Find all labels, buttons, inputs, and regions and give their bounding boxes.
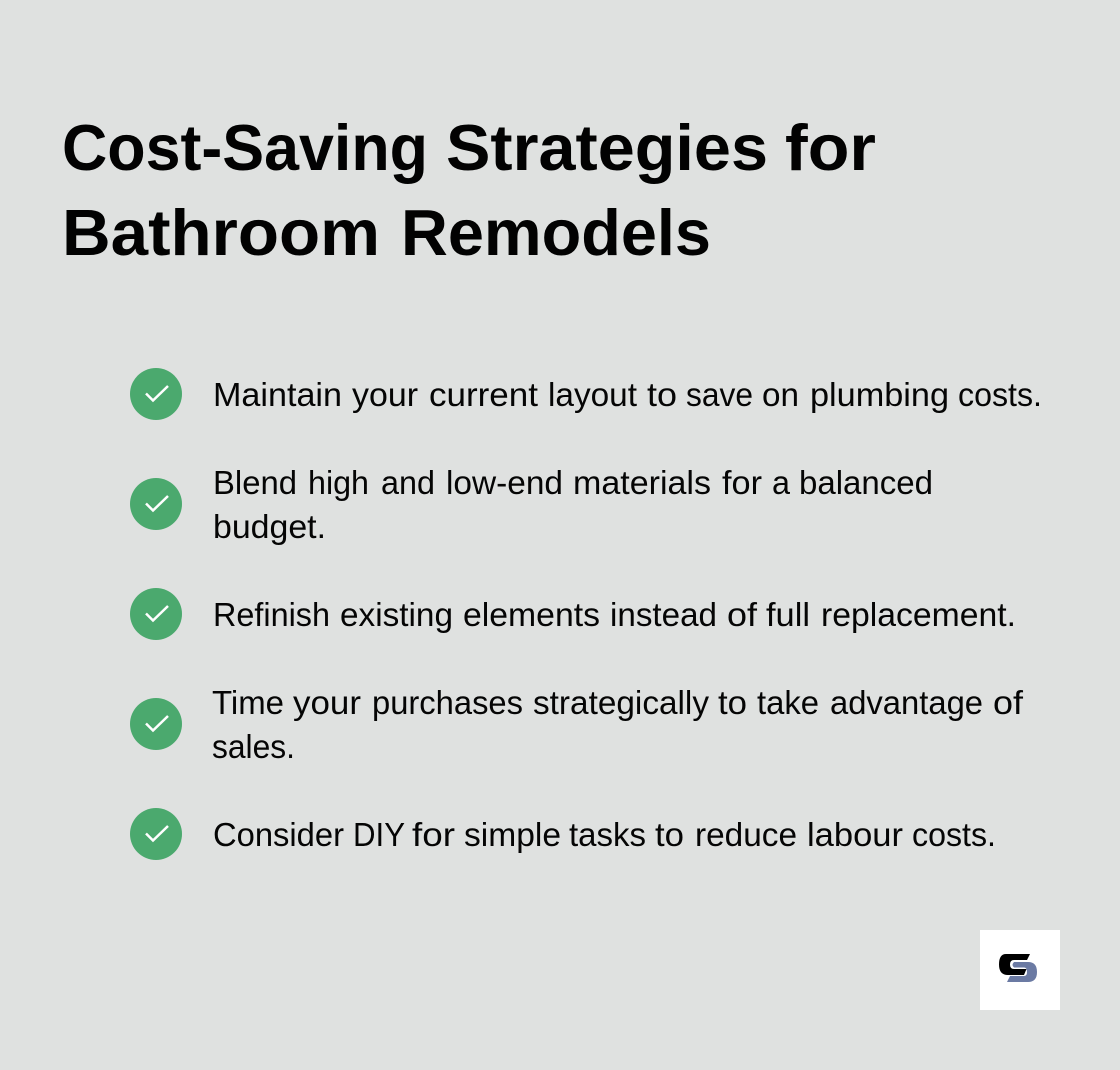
text: item 2 bbox=[213, 464, 933, 545]
text: item 3: instead bbox=[610, 596, 717, 633]
text: item 2: Blend bbox=[213, 464, 297, 501]
text: item 4: your bbox=[293, 684, 361, 721]
text: item 1 bbox=[213, 376, 1042, 413]
text: item 2: for bbox=[722, 464, 762, 501]
icon: check 1 bbox=[130, 368, 182, 420]
title bbox=[62, 112, 876, 269]
text: item 2: materials bbox=[573, 464, 711, 501]
text: item 1: plumbing bbox=[810, 376, 949, 413]
text: item 5: reduce bbox=[695, 816, 797, 853]
item 1: layout bbox=[130, 368, 1042, 420]
text: item 5: DIY bbox=[353, 816, 405, 853]
text: item 4: take bbox=[757, 684, 819, 721]
text: item 1: layout bbox=[548, 376, 637, 413]
icon: check 4 bbox=[130, 698, 182, 750]
text: item 4: Time bbox=[212, 684, 284, 721]
text: item 4: purchases bbox=[372, 684, 523, 721]
text: item 1: save bbox=[686, 376, 753, 413]
text: item 2: a bbox=[772, 464, 791, 501]
text: item 5 bbox=[213, 816, 996, 853]
text: item 4: strategically bbox=[533, 684, 710, 721]
text: item 4: of bbox=[993, 684, 1024, 721]
text: item 3: of bbox=[727, 596, 758, 633]
text: item 2: low-end bbox=[446, 464, 563, 501]
text: item 4: advantage bbox=[830, 684, 983, 721]
text: item 2: high bbox=[308, 464, 369, 501]
text: item 5: simple bbox=[464, 816, 561, 853]
text: item 4: to bbox=[718, 684, 747, 721]
title: for bbox=[785, 112, 876, 184]
item 3: refinish bbox=[130, 588, 1016, 640]
icon: check 5 bbox=[130, 808, 182, 860]
text: item 1: your bbox=[352, 376, 418, 413]
text: item 3: replacement. bbox=[821, 596, 1016, 633]
text: item 4: sales. bbox=[212, 728, 295, 765]
text: item 4 bbox=[212, 684, 1024, 765]
checklist bbox=[130, 368, 1042, 860]
title: Remodels bbox=[401, 197, 711, 269]
text: item 3: existing bbox=[340, 596, 453, 633]
item 4: timing bbox=[130, 684, 1024, 765]
title: Strategies bbox=[446, 112, 768, 184]
text: item 1: on bbox=[762, 376, 799, 413]
text: item 1: to bbox=[647, 376, 677, 413]
text: item 1: current bbox=[429, 376, 538, 413]
text: item 5: labour bbox=[807, 816, 903, 853]
text: item 5: costs. bbox=[912, 816, 996, 853]
text: item 2: budget. bbox=[213, 508, 326, 545]
logo badge bbox=[980, 930, 1060, 1010]
text: item 3: Refinish bbox=[213, 596, 330, 633]
text: item 2: and bbox=[381, 464, 435, 501]
text: item 1: Maintain bbox=[213, 376, 342, 413]
icon: check 2 bbox=[130, 478, 182, 530]
text: item 5: Consider bbox=[213, 816, 344, 853]
item 2: materials bbox=[130, 464, 933, 545]
title: Bathroom bbox=[62, 197, 380, 269]
text: item 5: tasks bbox=[569, 816, 646, 853]
text: item 3: full bbox=[766, 596, 810, 633]
text: item 1: costs. bbox=[958, 376, 1042, 413]
text: item 5: for bbox=[412, 816, 455, 853]
icon: check 3 bbox=[130, 588, 182, 640]
text: item 2: balanced bbox=[799, 464, 933, 501]
title: Cost-Saving bbox=[62, 112, 428, 184]
text: item 3: elements bbox=[463, 596, 600, 633]
text: item 3 bbox=[213, 596, 1016, 633]
item 5: DIY bbox=[130, 808, 996, 860]
text: item 5: to bbox=[655, 816, 684, 853]
